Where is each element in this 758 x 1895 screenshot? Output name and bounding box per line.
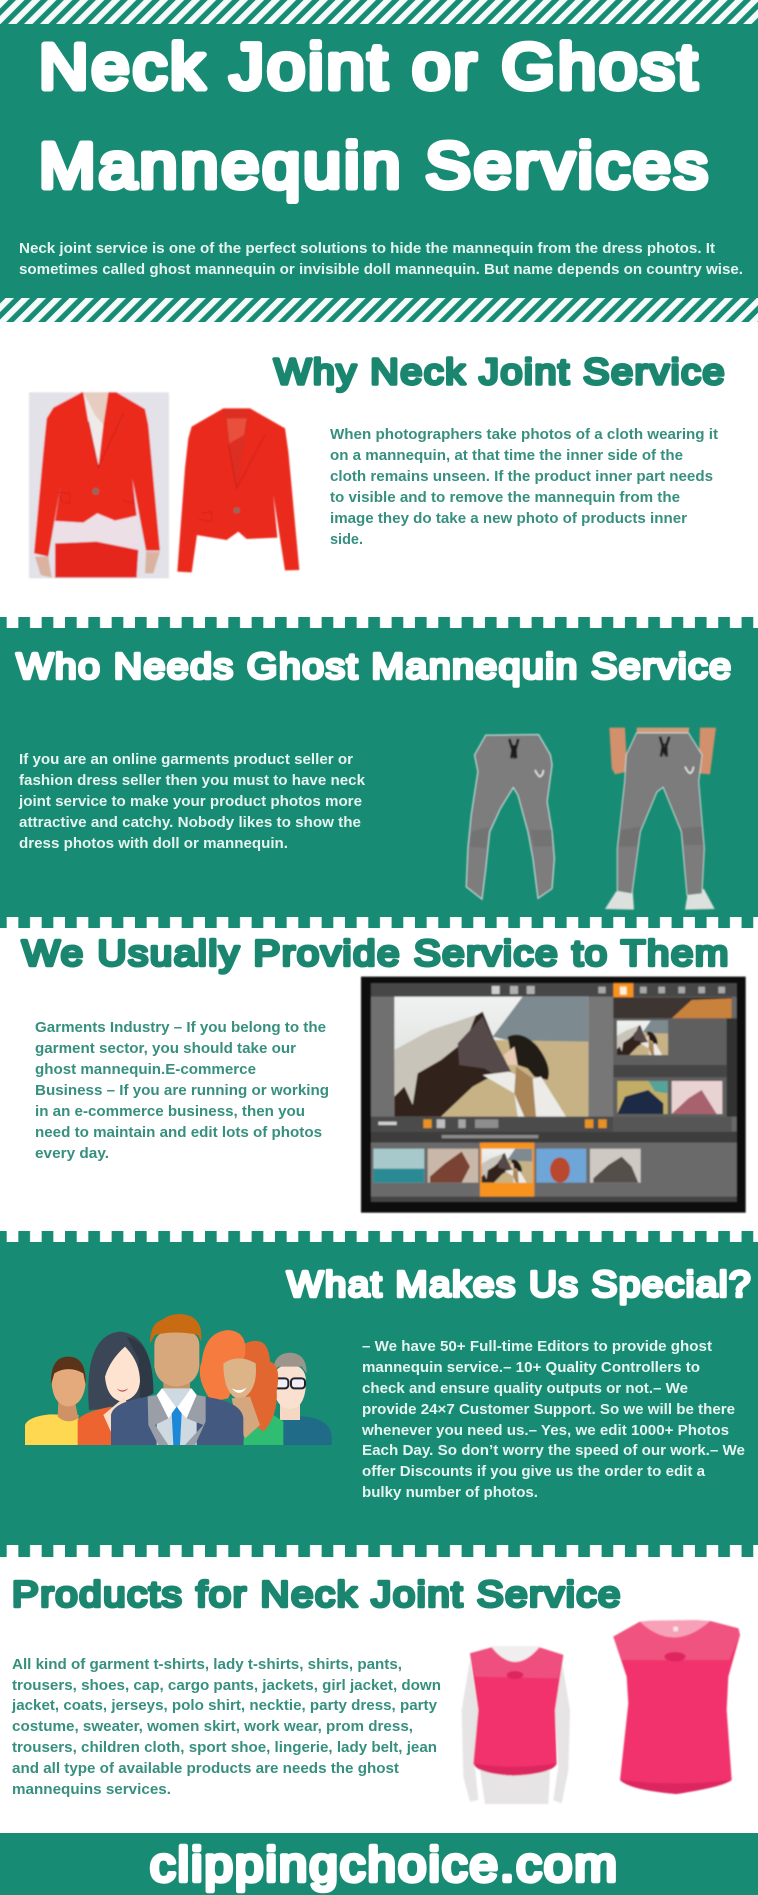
- body text: who needs: [18, 751, 366, 852]
- body text: service: ghost mannequin.E-commerce: [35, 1061, 256, 1078]
- footer website text: clippingchoice.com: [150, 1839, 619, 1892]
- body text: why: side.: [330, 531, 363, 548]
- panel: we usually provide service: [22, 932, 746, 1213]
- intro text: [19, 240, 743, 278]
- body text: special: [361, 1338, 745, 1501]
- body text: who needs: dress photos with doll or mannequin.: [19, 835, 288, 852]
- body text: why: image they do take a new photo of products inner: [330, 510, 687, 527]
- crenellated edge: [0, 917, 758, 928]
- body text: products: trousers, shoes, cap, cargo pants, jackets, girl jacket, down: [12, 1677, 441, 1694]
- body text: service: garment sector, you should take our: [35, 1040, 296, 1057]
- illustration: team of people: [25, 1314, 332, 1445]
- body text: special: mannequin service.– 10+ Quality Controllers to: [362, 1359, 700, 1376]
- panel: what makes us special: [0, 1242, 758, 1545]
- body text: service: in an e-commerce business, then you: [35, 1103, 305, 1120]
- body text: why: on a mannequin, at that time the inner side of the: [330, 447, 683, 464]
- body text: special: check and ensure quality outputs or not.– We: [362, 1380, 688, 1397]
- photo: pink blouses: [462, 1620, 740, 1804]
- body text: service: every day.: [35, 1145, 109, 1162]
- heading: who needs: Who Needs Ghost Mannequin Service: [16, 646, 732, 686]
- panel: why neck joint service: [29, 351, 726, 578]
- body text: why: [330, 426, 718, 548]
- heading: what makes us special: What Makes Us Special?: [287, 1264, 752, 1304]
- body text: service: need to maintain and edit lots of photos: [35, 1124, 322, 1141]
- body text: why: to visible and to remove the mannequin from the: [330, 489, 680, 506]
- body text: service: [35, 1019, 329, 1162]
- screenshot: photo editor: [361, 977, 746, 1213]
- body text: special: provide 24×7 Customer Support. So we will be there: [362, 1401, 735, 1418]
- heading: products: Products for Neck Joint Service: [12, 1574, 622, 1614]
- body text: service: Business – If you are running or working: [35, 1082, 329, 1099]
- panel: products for neck joint service: [11, 1574, 740, 1804]
- heading: we usually provide: We Usually Provide Service to Them: [22, 932, 730, 974]
- title: Neck Joint or Ghost: [39, 30, 700, 102]
- crenellated edge: [0, 1545, 758, 1557]
- title: [39, 30, 711, 202]
- panel: who needs ghost mannequin service: [0, 628, 758, 917]
- body text: why: When photographers take photos of a cloth wearing it: [330, 426, 718, 443]
- body text: who needs: If you are an online garments product seller or: [19, 751, 353, 768]
- body text: products: jacket, coats, jerseys, polo shirt, necktie, party dress, party: [11, 1697, 438, 1714]
- body text: special: offer Discounts if you give us the order to edit a: [362, 1463, 706, 1480]
- photo: grey trousers: [467, 728, 716, 910]
- body text: who needs: fashion dress seller then you must to have neck: [19, 772, 366, 789]
- body text: special: whenever you need us.– Yes, we edit 1000+ Photos: [361, 1422, 729, 1439]
- body text: special: bulky number of photos.: [362, 1484, 538, 1501]
- body text: special: – We have 50+ Full-time Editors to provide ghost: [362, 1338, 712, 1355]
- body text: products: [11, 1656, 441, 1798]
- body text: why: cloth remains unseen. If the product inner part needs: [330, 468, 713, 485]
- footer band: [0, 1833, 758, 1895]
- intro text: Neck joint service is one of the perfect solutions to hide the mannequin from the dress photos. It: [19, 240, 715, 257]
- body text: who needs: attractive and catchy. Nobody likes to show the: [19, 814, 361, 831]
- body text: service: Garments Industry – If you belong to the: [35, 1019, 326, 1036]
- stripe band below header: [0, 298, 758, 322]
- crenellated edge: [0, 1231, 758, 1242]
- body text: who needs: joint service to make your product photos more: [18, 793, 362, 810]
- panel: title header: [0, 24, 758, 298]
- body text: products: and all type of available products are needs the ghost: [12, 1760, 399, 1777]
- body text: products: All kind of garment t-shirts, lady t-shirts, shirts, pants,: [12, 1656, 402, 1673]
- crenellated edge: [0, 617, 758, 628]
- body text: special: Each Day. So don’t worry the speed of our work.– We: [362, 1442, 745, 1459]
- body text: products: costume, sweater, women skirt, work wear, prom dress,: [12, 1718, 413, 1735]
- photo: red jackets: [29, 392, 299, 578]
- body text: products: trousers, children cloth, sport shoe, lingerie, lady belt, jean: [12, 1739, 437, 1756]
- intro text: sometimes called ghost mannequin or invisible doll mannequin. But name depends on country wise.: [19, 261, 743, 278]
- heading: why neck joint service: Why Neck Joint Service: [274, 351, 726, 392]
- top stripe band: [0, 0, 758, 24]
- body text: products: mannequins services.: [12, 1781, 171, 1798]
- title: Mannequin Services: [39, 130, 711, 202]
